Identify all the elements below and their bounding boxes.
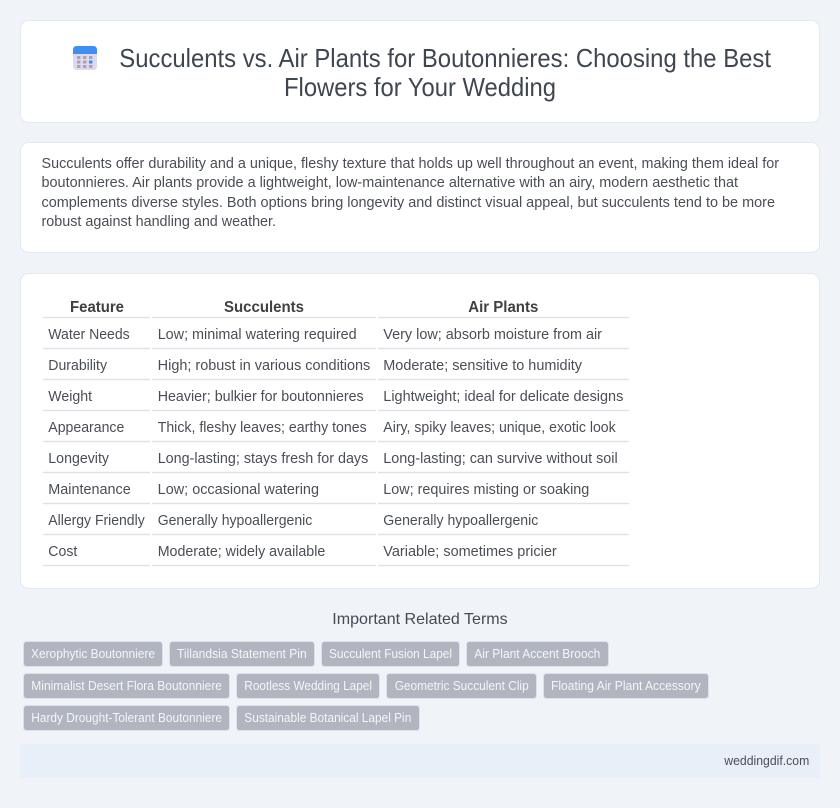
tag: hardy drought-tolerant boutonniere — [24, 706, 230, 730]
title: Succulents vs. Air Plants for Boutonnieres: Choosing the Best — [119, 45, 771, 73]
row: water needs: Water Needs — [48, 327, 130, 343]
row: appearance: Appearance — [48, 420, 124, 436]
tag: succulent fusion lapel: Succulent Fusion Lapel — [329, 646, 452, 661]
intro paragraph — [42, 156, 779, 230]
intro paragraph: boutonnieres. Air plants provide a lightweight, low-maintenance alternative with an airy, modern aesthetic that — [42, 175, 738, 191]
panel: title header — [20, 20, 820, 122]
row: maintenance: Maintenance — [48, 482, 131, 498]
row: allergy friendly: Generally hypoallergenic — [158, 513, 312, 529]
table header: Succulents — [224, 299, 304, 316]
tag: minimalist desert flora boutonniere — [24, 674, 230, 698]
row: water needs: Low; minimal watering required — [158, 327, 357, 343]
row: longevity — [48, 451, 618, 467]
tag: sustainable botanical lapel pin — [236, 706, 420, 730]
table header: Feature — [70, 299, 124, 316]
tag: minimalist desert flora boutonniere: Minimalist Desert Flora Boutonniere — [31, 678, 222, 693]
tag: rootless wedding lapel: Rootless Wedding Lapel — [244, 678, 372, 693]
row: durability — [48, 358, 583, 374]
tag: tillandsia statement pin — [170, 642, 314, 666]
row: cost: Cost — [48, 544, 77, 560]
row: weight: Heavier; bulkier for boutonnieres — [158, 389, 364, 405]
title — [119, 45, 771, 102]
footer bar: weddingdif.com — [723, 753, 809, 768]
panel: related term tags — [24, 642, 708, 730]
row: longevity: Longevity — [48, 451, 110, 467]
row: maintenance — [48, 482, 589, 498]
tag: tillandsia statement pin: Tillandsia Statement Pin — [177, 646, 307, 661]
intro paragraph: robust against handling and weather. — [42, 214, 276, 230]
row: weight — [48, 389, 623, 405]
tag: floating air plant accessory: Floating Air Plant Accessory — [551, 678, 701, 693]
row: appearance — [48, 420, 616, 436]
row: durability: High; robust in various conditions — [158, 358, 370, 374]
row: cost: Variable; sometimes pricier — [383, 544, 557, 560]
row: allergy friendly: Generally hypoallergenic — [383, 513, 538, 529]
row: durability: Moderate; sensitive to humidity — [383, 358, 583, 374]
row: durability: Durability — [48, 358, 108, 374]
row: allergy friendly — [48, 513, 538, 529]
row: cost — [48, 544, 557, 560]
table header: Air Plants — [468, 299, 538, 316]
row: appearance: Airy, spiky leaves; unique, exotic look — [383, 420, 616, 436]
heading: important related terms: Important Related Terms — [332, 611, 508, 628]
row: maintenance: Low; occasional watering — [158, 482, 319, 498]
icon: calendar — [73, 46, 97, 70]
table header — [70, 299, 538, 316]
panel: comparison table — [20, 274, 820, 588]
intro paragraph: complements diverse styles. Both options bring longevity and distinct visual appeal, but succulents tend to be more — [42, 195, 775, 211]
tag: xerophytic boutonniere: Xerophytic Boutonniere — [31, 646, 155, 661]
tag: air plant accent brooch: Air Plant Accent Brooch — [474, 646, 600, 661]
tag: sustainable botanical lapel pin: Sustainable Botanical Lapel Pin — [244, 710, 411, 725]
row: appearance: Thick, fleshy leaves; earthy tones — [158, 420, 367, 436]
row: water needs: Very low; absorb moisture from air — [383, 327, 602, 343]
intro paragraph: Succulents offer durability and a unique, fleshy texture that holds up well throughout an event, making them ideal for — [42, 156, 779, 172]
row: longevity: Long-lasting; can survive without soil — [383, 451, 618, 467]
panel: introduction — [20, 142, 820, 252]
tag: air plant accent brooch — [466, 642, 608, 666]
row: longevity: Long-lasting; stays fresh for days — [158, 451, 368, 467]
row: cost: Moderate; widely available — [158, 544, 325, 560]
tag: geometric succulent clip — [386, 674, 536, 698]
tag: succulent fusion lapel — [322, 642, 460, 666]
row: allergy friendly: Allergy Friendly — [48, 513, 145, 529]
row: water needs — [48, 327, 602, 343]
tag: hardy drought-tolerant boutonniere: Hardy Drought-Tolerant Boutonniere — [31, 710, 222, 725]
row: weight: Lightweight; ideal for delicate designs — [383, 389, 623, 405]
title: Flowers for Your Wedding — [284, 74, 556, 102]
row: maintenance: Low; requires misting or soaking — [383, 482, 589, 498]
tag: floating air plant accessory — [544, 674, 708, 698]
row: weight: Weight — [48, 389, 92, 405]
tag: rootless wedding lapel — [236, 674, 380, 698]
tag: geometric succulent clip: Geometric Succulent Clip — [395, 678, 529, 693]
footer bar — [20, 744, 820, 778]
tag: xerophytic boutonniere — [24, 642, 162, 666]
